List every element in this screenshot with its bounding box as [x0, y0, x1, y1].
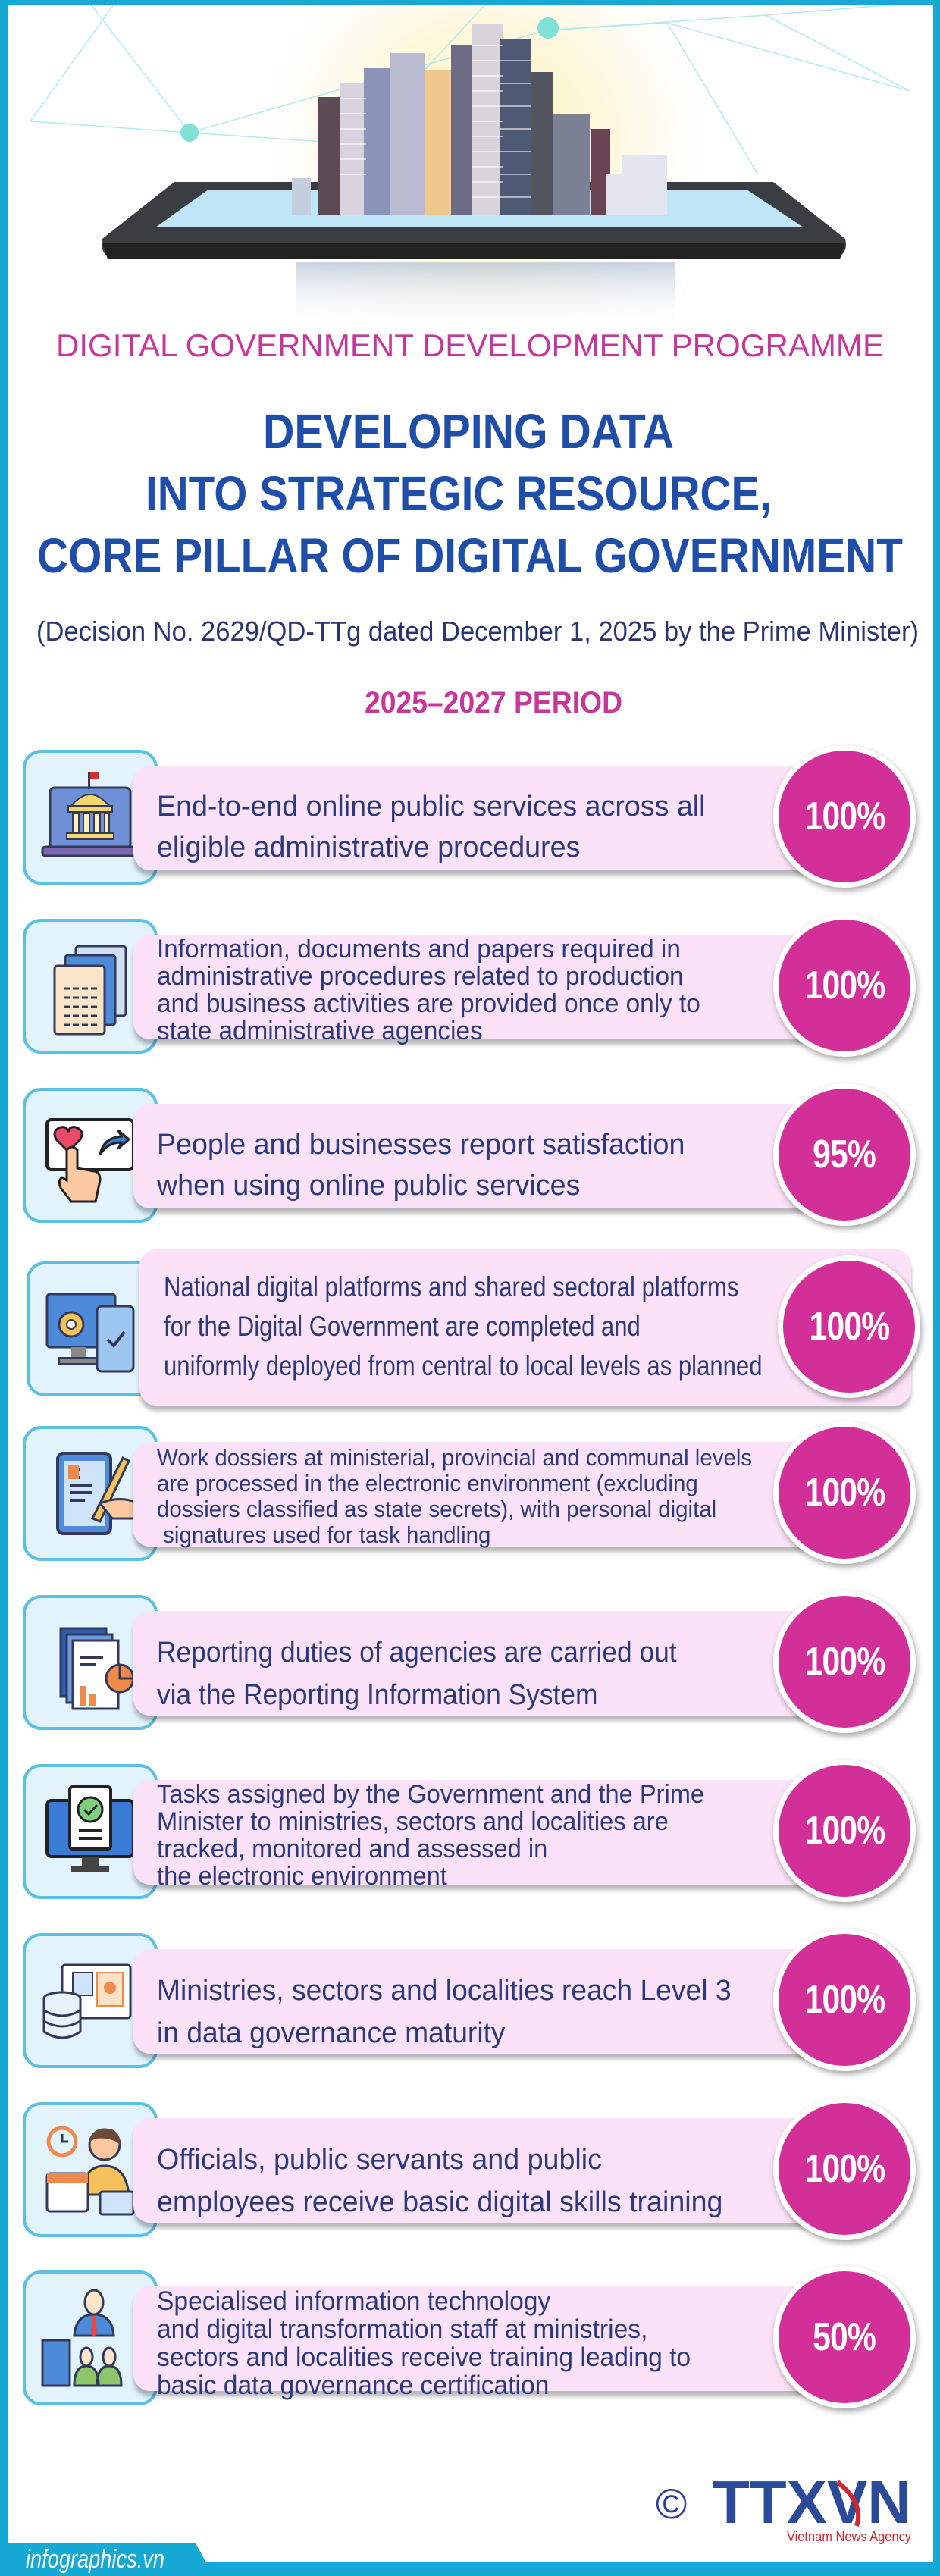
icon: person with calendar and clock: [45, 2126, 135, 2215]
text: [157, 1637, 677, 1711]
text: [157, 2144, 722, 2218]
text: dossiers classified as state secrets), with personal digital: [157, 1496, 716, 1522]
text: Ministries, sectors and localities reach Level 3: [157, 1975, 732, 2007]
icon: stacked documents: [53, 945, 127, 1036]
text: in data governance maturity: [157, 2017, 506, 2049]
text: [157, 1129, 685, 1202]
icon: reports with chart: [59, 1627, 133, 1710]
value circle: 100%: [804, 2147, 885, 2191]
text: Minister to ministries, sectors and localities are: [157, 1807, 669, 1836]
row 9: [23, 2097, 921, 2247]
row 7: [23, 1759, 921, 1909]
value circle: 100%: [804, 1809, 885, 1853]
text: state administrative agencies: [157, 1017, 483, 1045]
text: [157, 1975, 732, 2049]
value circle: [773, 745, 916, 888]
icon: monitor with approved document: [45, 1785, 133, 1872]
text: [157, 791, 706, 863]
value circle: 100%: [804, 1640, 885, 1684]
programme subtitle: DIGITAL GOVERNMENT DEVELOPMENT PROGRAMME: [56, 327, 884, 363]
decision reference: (Decision No. 2629/QD-TTg dated December 1, 2025 by the Prime Minister): [36, 616, 919, 647]
row 8: [23, 1928, 921, 2078]
icon: heart touch share: [45, 1118, 133, 1202]
text: [164, 1271, 763, 1381]
value circle: [773, 1760, 916, 1902]
text: basic data governance certification: [157, 2371, 549, 2400]
text: via the Reporting Information System: [157, 1679, 597, 1711]
buildings: [292, 24, 667, 215]
text: and business activities are provided once only to: [157, 989, 700, 1018]
value circle: 100%: [804, 1471, 885, 1515]
main title: DEVELOPING DATA: [263, 404, 674, 459]
row 3: [23, 1083, 921, 1233]
text: Officials, public servants and public: [157, 2144, 602, 2176]
value circle: [773, 2266, 916, 2408]
value circle: [773, 2098, 916, 2240]
footer bar with site name: [8, 2543, 933, 2576]
icon: staff hierarchy with building: [41, 2289, 123, 2386]
period heading: 2025–2027 PERIOD: [365, 686, 622, 719]
row 5: [23, 1421, 921, 1571]
text: National digital platforms and shared sectoral platforms: [164, 1271, 738, 1302]
text: are processed in the electronic environment (excluding: [157, 1470, 698, 1496]
value circle: [773, 914, 916, 1057]
text: End-to-end online public services across all: [157, 791, 706, 823]
text: signatures used for task handling: [163, 1521, 490, 1548]
value circle: 50%: [813, 2315, 876, 2359]
main title: [37, 404, 903, 583]
row 10: [23, 2265, 921, 2415]
row 6: [23, 1590, 921, 1740]
value circle: 100%: [804, 794, 885, 838]
phone: [102, 182, 846, 259]
value circle: 100%: [809, 1305, 889, 1349]
value circle: [773, 1083, 916, 1226]
text: when using online public services: [157, 1170, 580, 1202]
row 4: [27, 1249, 926, 1413]
icon: government building on laptop: [41, 772, 133, 857]
copyright and TTXVN logo: [656, 2473, 911, 2544]
value circle: [773, 1590, 916, 1733]
icon: tablet with signing hand: [56, 1452, 133, 1535]
text: Work dossiers at ministerial, provincial and communal levels: [157, 1444, 752, 1471]
text: and digital transformation staff at ministries,: [157, 2314, 647, 2344]
text: sectors and localities receive training leading to: [157, 2343, 691, 2372]
text: [157, 1780, 704, 1891]
text: employees receive basic digital skills training: [157, 2186, 722, 2218]
value circle: 100%: [804, 964, 885, 1008]
text: Reporting duties of agencies are carried out: [157, 1637, 677, 1669]
row 2: [23, 914, 921, 1064]
value circle: [778, 1255, 920, 1398]
text: Information, documents and papers required in: [157, 935, 681, 964]
icon: database and data governance: [42, 1963, 132, 2039]
value circle: [773, 1421, 916, 1564]
value circle: 95%: [813, 1133, 876, 1177]
value circle: [773, 1929, 916, 2071]
main title: INTO STRATEGIC RESOURCE,: [146, 466, 772, 521]
text: [157, 2286, 691, 2400]
text: administrative procedures related to production: [157, 962, 684, 991]
text: the electronic environment: [157, 1862, 447, 1891]
header illustration: city on smartphone: [30, 5, 910, 312]
text: [157, 1444, 752, 1548]
row 1: [23, 744, 921, 895]
text: eligible administrative procedures: [157, 832, 580, 863]
text: Specialised information technology: [157, 2286, 550, 2316]
text: tracked, monitored and assessed in: [157, 1835, 547, 1863]
text: for the Digital Government are completed and: [164, 1311, 641, 1342]
text: uniformly deployed from central to local levels as planned: [164, 1350, 763, 1381]
copyright and TTXVN logo: ©: [656, 2480, 687, 2527]
value circle: 100%: [804, 1978, 885, 2022]
text: People and businesses report satisfaction: [157, 1129, 685, 1161]
footer bar with site name: infographics.vn: [26, 2545, 164, 2574]
icon: computer with gear and phone: [45, 1293, 135, 1372]
text: [157, 935, 700, 1045]
reflection: [296, 262, 675, 330]
text: Tasks assigned by the Government and the Prime: [157, 1780, 704, 1809]
